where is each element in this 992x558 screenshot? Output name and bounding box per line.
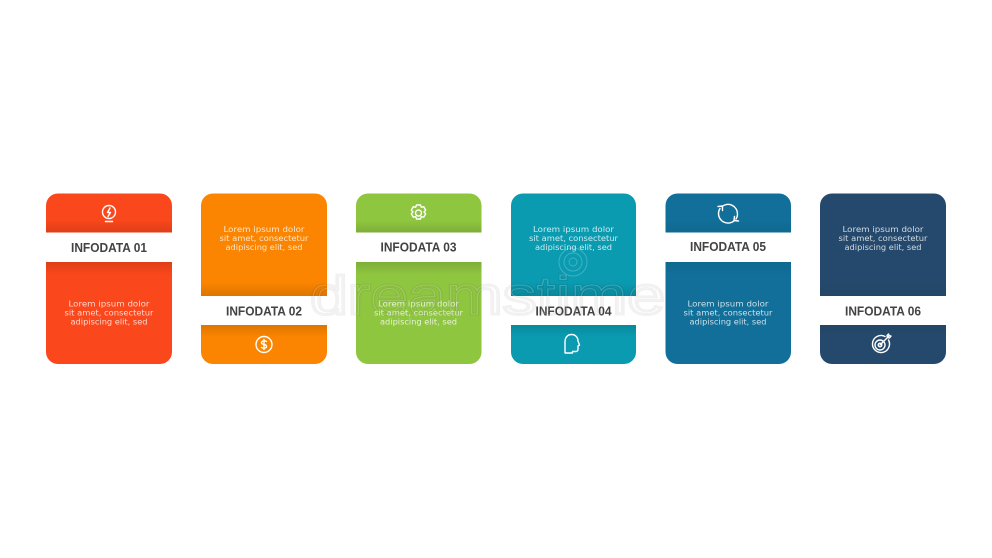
- text block: card 2: [220, 224, 309, 252]
- watermark: [310, 248, 665, 326]
- text block: card 3: [374, 298, 464, 326]
- text block: card 3: adipiscing elit, sed: [380, 316, 457, 326]
- text block: card 6: [838, 224, 928, 252]
- watermark: dreamstime: [310, 266, 665, 326]
- panel: infodata 02: [201, 194, 327, 364]
- icon: light bulb: [102, 206, 116, 222]
- text block: card 5: adipiscing elit, sed: [690, 316, 766, 326]
- text block: card 1: Lorem ipsum dolor: [68, 298, 150, 308]
- text block: card 1: sit amet, consectetur: [64, 308, 154, 318]
- text block: card 2: adipiscing elit, sed: [226, 242, 302, 252]
- text block: card 5: [684, 298, 773, 326]
- panel: infodata 06: [820, 194, 946, 364]
- text block: card 2: sit amet, consectetur: [220, 233, 309, 243]
- panel: infodata 01: [46, 194, 172, 364]
- text block: card 6: sit amet, consectetur: [838, 233, 928, 243]
- text block: card 5: Lorem ipsum dolor: [688, 298, 769, 308]
- text block: card 1: [64, 298, 154, 326]
- panel: infodata 05: [666, 194, 791, 364]
- heading: infodata 02: INFODATA 02: [226, 304, 302, 318]
- icon: target: [872, 334, 891, 352]
- text block: card 6: adipiscing elit, sed: [844, 242, 922, 252]
- heading: infodata 06: INFODATA 06: [845, 304, 921, 318]
- heading: infodata 05: INFODATA 05: [690, 240, 766, 254]
- heading: infodata 01: INFODATA 01: [71, 241, 147, 255]
- text block: card 6: Lorem ipsum dolor: [842, 224, 924, 234]
- text block: card 4: sit amet, consectetur: [529, 233, 619, 243]
- icon: head: [565, 334, 580, 353]
- text block: card 2: Lorem ipsum dolor: [224, 224, 305, 234]
- text block: card 4: adipiscing elit, sed: [535, 242, 612, 252]
- panel: infodata 03: [356, 194, 482, 364]
- icon: gear: [411, 205, 426, 219]
- text block: card 5: sit amet, consectetur: [684, 308, 773, 318]
- text block: card 3: Lorem ipsum dolor: [378, 298, 460, 308]
- text block: card 3: sit amet, consectetur: [374, 308, 464, 318]
- icon: dollar coin: [256, 336, 272, 352]
- text block: card 4: Lorem ipsum dolor: [533, 224, 615, 234]
- heading: infodata 04: INFODATA 04: [536, 304, 612, 318]
- watermark: dreamstime: [310, 266, 665, 326]
- text block: card 1: adipiscing elit, sed: [70, 316, 148, 326]
- panel: infodata 04: [511, 194, 636, 364]
- heading: infodata 03: INFODATA 03: [380, 240, 457, 254]
- icon: refresh arrows: [718, 204, 738, 223]
- text block: card 4: [529, 224, 619, 252]
